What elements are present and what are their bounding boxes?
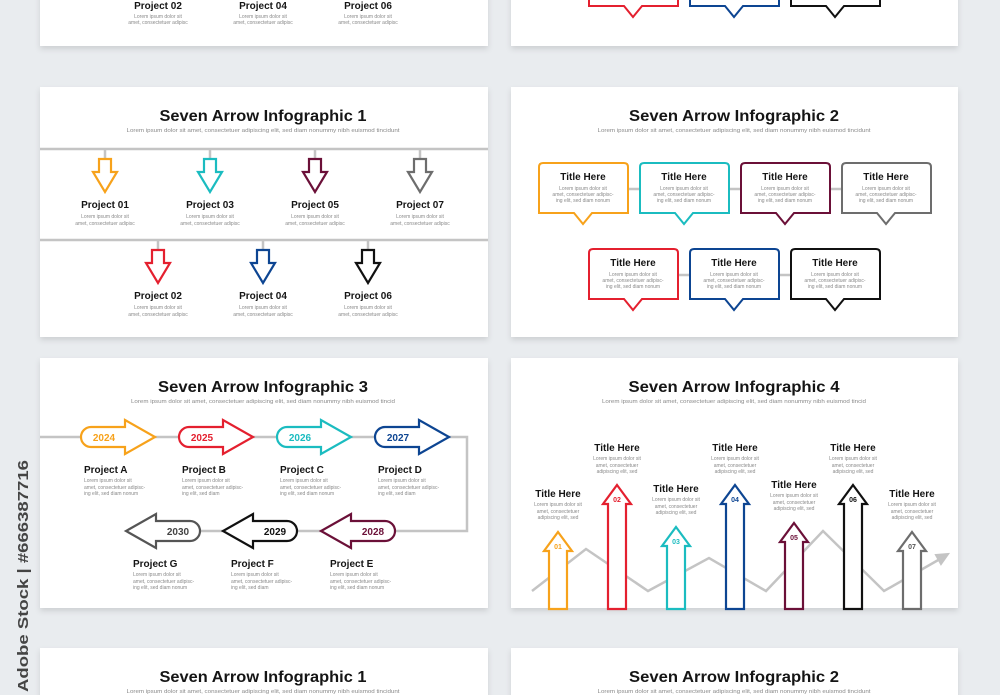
slide: Seven Arrow Infographic 1: Project 01: [81, 200, 129, 211]
slide: Seven Arrow Infographic 2: amet, consectetuer adipisc-: [855, 192, 917, 198]
slide: Seven Arrow Infographic 3: amet, consectetuer adipisc-: [280, 485, 341, 491]
slide: Seven Arrow Infographic 3: Lorem ipsum dolor sit: [231, 572, 279, 578]
slide: top-left partial: [40, 0, 488, 46]
slide: Seven Arrow Infographic 3: amet, consectetuer adipisc-: [84, 485, 145, 491]
slide: Seven Arrow Infographic 4: 05: [790, 535, 798, 542]
slide: Seven Arrow Infographic 4: amet, consectetuer: [832, 463, 875, 469]
slide: Seven Arrow Infographic 2: ing elit, sed diam nonum: [707, 284, 761, 290]
slide: top-left partial: Project 06: [344, 1, 392, 12]
slide: Seven Arrow Infographic 2: Title Here: [711, 258, 757, 269]
slide: Seven Arrow Infographic 3: ing elit, sed diam nonum: [330, 585, 384, 591]
slide: Seven Arrow Infographic 4: Title Here: [594, 443, 640, 454]
slide: Seven Arrow Infographic 2: Lorem ipsum dolor sit: [710, 272, 759, 278]
slide: Seven Arrow Infographic 3: ing elit, sed diam nonum: [84, 491, 138, 497]
slide: Seven Arrow Infographic 4: 03: [672, 539, 680, 546]
slide: Seven Arrow Infographic 3: Lorem ipsum dolor sit: [133, 572, 181, 578]
slide: Seven Arrow Infographic 4: adipiscing elit, sed: [715, 469, 756, 475]
slide: Seven Arrow Infographic 4: Lorem ipsum dolor sit: [888, 502, 937, 508]
slide: Seven Arrow Infographic 4: amet, consectetuer: [891, 509, 934, 515]
slide: Seven Arrow Infographic 4: 06: [849, 497, 857, 504]
slide: top-left partial: Lorem ipsum dolor sit: [134, 14, 183, 20]
slide: Seven Arrow Infographic 3: Project B: [182, 465, 226, 476]
slide: Seven Arrow Infographic 2: ing elit, sed diam nonum: [859, 198, 913, 204]
slide: Seven Arrow Infographic 1: amet, consectetuer adipisc: [338, 312, 398, 318]
slide: Seven Arrow Infographic 1: amet, consectetuer adipisc: [128, 312, 188, 318]
slide: Seven Arrow Infographic 3: 2030: [167, 527, 190, 538]
slide: Seven Arrow Infographic 4: Lorem ipsum dolor sit: [829, 456, 878, 462]
slide: Seven Arrow Infographic 4: Lorem ipsum dolor sit: [593, 456, 642, 462]
slide: Seven Arrow Infographic 4: Lorem ipsum dolor sit: [711, 456, 760, 462]
slide: Seven Arrow Infographic 4: amet, consectetuer: [773, 500, 816, 506]
slide: top-left partial: Project 04: [239, 1, 287, 12]
slide: Seven Arrow Infographic 4: 02: [613, 497, 621, 504]
slide: Seven Arrow Infographic 2: Title Here: [610, 258, 656, 269]
slide: Seven Arrow Infographic 3: Project C: [280, 465, 324, 476]
slide: Seven Arrow Infographic 3: Lorem ipsum dolor sit: [280, 478, 328, 484]
slide: Seven Arrow Infographic 4: Lorem ipsum dolor sit amet, consectetuer adipiscing elit, sed diam nonummy nibh euismod tincid: [602, 399, 866, 405]
slide: Seven Arrow Infographic 4: adipiscing elit, sed: [774, 506, 815, 512]
slide: top-left partial: Project 02: [134, 1, 182, 12]
slide: Seven Arrow Infographic 3: Project E: [330, 559, 374, 570]
slide: Seven Arrow Infographic 1: Project 05: [291, 200, 339, 211]
slide: Seven Arrow Infographic 2: Lorem ipsum dolor sit: [609, 272, 658, 278]
slide: Seven Arrow Infographic 2: Title Here: [812, 258, 858, 269]
slide: top-left partial: amet, consectetuer adipisc: [233, 20, 293, 26]
slide: Seven Arrow Infographic 1: [40, 87, 488, 337]
slide: Seven Arrow Infographic 2: ing elit, sed diam nonum: [556, 198, 610, 204]
slide: Seven Arrow Infographic 2: Lorem ipsum dolor sit: [559, 186, 608, 192]
slide: Seven Arrow Infographic 2: Lorem ipsum dolor sit: [862, 186, 911, 192]
slide: Seven Arrow Infographic 2: Lorem ipsum dolor sit: [811, 272, 860, 278]
slide: Seven Arrow Infographic 4: Lorem ipsum dolor sit: [652, 497, 701, 503]
slide: Seven Arrow Infographic 1: amet, consectetuer adipisc: [285, 221, 345, 227]
slide: Seven Arrow Infographic 3: ing elit, sed diam nonum: [133, 585, 187, 591]
slide: Seven Arrow Infographic 1: amet, consectetuer adipisc: [390, 221, 450, 227]
slide: Seven Arrow Infographic 3: ing elit, sed diam: [182, 491, 220, 497]
slide: Seven Arrow Infographic 3: amet, consectetuer adipisc-: [182, 485, 243, 491]
slide: Seven Arrow Infographic 4: Title Here: [889, 489, 935, 500]
slide: Seven Arrow Infographic 3: amet, consectetuer adipisc-: [330, 579, 391, 585]
slide: Seven Arrow Infographic 4: Lorem ipsum dolor sit: [534, 502, 583, 508]
slide: Seven Arrow Infographic 3: [40, 358, 488, 608]
slide: Seven Arrow Infographic 3: Project D: [378, 465, 422, 476]
slide: Seven Arrow Infographic 1: amet, consectetuer adipisc: [233, 312, 293, 318]
slide: Seven Arrow Infographic 3: Project F: [231, 559, 274, 570]
slide: Seven Arrow Infographic 4: amet, consectetuer: [714, 463, 757, 469]
slide: Seven Arrow Infographic 4: 07: [908, 544, 916, 551]
slide: Seven Arrow Infographic 4: Title Here: [712, 443, 758, 454]
slide: Seven Arrow Infographic 1: amet, consectetuer adipisc: [75, 221, 135, 227]
slide: top-right partial: [511, 0, 958, 46]
slide: top-left partial: amet, consectetuer adipisc: [128, 20, 188, 26]
slide: Seven Arrow Infographic 2: ing elit, sed diam nonum: [758, 198, 812, 204]
slide: Seven Arrow Infographic 3: ing elit, sed diam: [231, 585, 269, 591]
slide: Seven Arrow Infographic 4: adipiscing elit, sed: [833, 469, 874, 475]
slide: Seven Arrow Infographic 2: amet, consectetuer adipisc-: [754, 192, 816, 198]
slide: Seven Arrow Infographic 1: Lorem ipsum dolor sit amet, consectetuer adipiscing elit, sed diam nonummy nibh euismod tincidunt: [126, 128, 400, 134]
slide: Seven Arrow Infographic 3: amet, consectetuer adipisc-: [231, 579, 292, 585]
slide: Seven Arrow Infographic 2: Lorem ipsum dolor sit: [761, 186, 810, 192]
vertical watermark text: Adobe Stock | #666387716: [15, 460, 32, 692]
slide: Seven Arrow Infographic 1: Lorem ipsum dolor sit: [396, 214, 445, 220]
slide: Seven Arrow Infographic 1: Project 06: [344, 291, 392, 302]
slide: top-left partial: Lorem ipsum dolor sit: [239, 14, 288, 20]
slide: Seven Arrow Infographic 4: adipiscing elit, sed: [656, 510, 697, 516]
slide: Seven Arrow Infographic 3: Lorem ipsum dolor sit: [84, 478, 132, 484]
slide: Seven Arrow Infographic 1: Lorem ipsum dolor sit: [344, 305, 393, 311]
slide: Seven Arrow Infographic 1: Lorem ipsum dolor sit: [186, 214, 235, 220]
slide: top-left partial: amet, consectetuer adipisc: [338, 20, 398, 26]
slide: Seven Arrow Infographic 3: Seven Arrow Infographic 3: [158, 379, 368, 396]
slide: Seven Arrow Infographic 4: Title Here: [535, 489, 581, 500]
slide: Seven Arrow Infographic 4: Title Here: [653, 484, 699, 495]
slide: Seven Arrow Infographic 4: Title Here: [771, 480, 817, 491]
slide: Seven Arrow Infographic 4: 01: [554, 544, 562, 551]
slide: bottom-right partial: [511, 648, 958, 695]
slide: top-left partial: Lorem ipsum dolor sit: [344, 14, 393, 20]
slide: Seven Arrow Infographic 3: Lorem ipsum dolor sit amet, consectetuer adipiscing elit, sed diam nonummy nibh euismod tincid: [131, 399, 395, 405]
slide: Seven Arrow Infographic 3: 2026: [289, 433, 312, 444]
slide: Seven Arrow Infographic 1: amet, consectetuer adipisc: [180, 221, 240, 227]
slide: Seven Arrow Infographic 3: 2028: [362, 527, 385, 538]
slide: Seven Arrow Infographic 3: 2025: [191, 433, 214, 444]
slide: Seven Arrow Infographic 3: amet, consectetuer adipisc-: [378, 485, 439, 491]
slide: Seven Arrow Infographic 2: Title Here: [762, 172, 808, 183]
slide: Seven Arrow Infographic 3: 2027: [387, 433, 410, 444]
slide: Seven Arrow Infographic 2: amet, consectetuer adipisc-: [703, 278, 765, 284]
slide: bottom-left partial: Seven Arrow Infographic 1: [160, 669, 367, 686]
slide: Seven Arrow Infographic 4: Lorem ipsum dolor sit: [770, 493, 819, 499]
slide: Seven Arrow Infographic 4: amet, consectetuer: [655, 504, 698, 510]
slide: Seven Arrow Infographic 3: Project A: [84, 465, 128, 476]
slide: Seven Arrow Infographic 2: Lorem ipsum dolor sit amet, consectetuer adipiscing elit, sed diam nonummy nibh euismod tincidunt: [598, 128, 871, 134]
slide: Seven Arrow Infographic 2: Title Here: [863, 172, 909, 183]
slide: Seven Arrow Infographic 3: 2029: [264, 527, 287, 538]
slide: Seven Arrow Infographic 1: Lorem ipsum dolor sit: [134, 305, 183, 311]
slide: Seven Arrow Infographic 4: [511, 358, 958, 609]
slide: Seven Arrow Infographic 3: Project G: [133, 559, 178, 570]
slide: Seven Arrow Infographic 3: Lorem ipsum dolor sit: [378, 478, 426, 484]
slide: bottom-left partial: Lorem ipsum dolor sit amet, consectetuer adipiscing elit, sed diam nonummy nibh euismod tincidunt: [126, 689, 400, 695]
slide: Seven Arrow Infographic 2: ing elit, sed diam nonum: [808, 284, 862, 290]
slide: Seven Arrow Infographic 2: amet, consectetuer adipisc-: [804, 278, 866, 284]
slide: Seven Arrow Infographic 2: Title Here: [560, 172, 606, 183]
slide: Seven Arrow Infographic 4: adipiscing elit, sed: [597, 469, 638, 475]
slide: Seven Arrow Infographic 2: ing elit, sed diam nonum: [606, 284, 660, 290]
slide: Seven Arrow Infographic 1: Project 03: [186, 200, 234, 211]
slide: Seven Arrow Infographic 2: ing elit, sed diam nonum: [657, 198, 711, 204]
slide: Seven Arrow Infographic 3: amet, consectetuer adipisc-: [133, 579, 194, 585]
slide: Seven Arrow Infographic 1: Project 02: [134, 291, 182, 302]
slide: Seven Arrow Infographic 3: ing elit, sed diam nonum: [280, 491, 334, 497]
slide: Seven Arrow Infographic 1: Lorem ipsum dolor sit: [291, 214, 340, 220]
slide: Seven Arrow Infographic 3: 2024: [93, 433, 116, 444]
slide: Seven Arrow Infographic 4: adipiscing elit, sed: [538, 515, 579, 521]
slide: bottom-left partial: [40, 648, 488, 695]
slide: Seven Arrow Infographic 1: Project 04: [239, 291, 287, 302]
slide: bottom-right partial: Seven Arrow Infographic 2: [629, 669, 839, 686]
slide: Seven Arrow Infographic 1: Seven Arrow Infographic 1: [160, 108, 367, 125]
slide: Seven Arrow Infographic 4: Title Here: [830, 443, 876, 454]
slide: Seven Arrow Infographic 1: Lorem ipsum dolor sit: [81, 214, 130, 220]
slide: Seven Arrow Infographic 2: Title Here: [661, 172, 707, 183]
slide: Seven Arrow Infographic 2: Lorem ipsum dolor sit: [660, 186, 709, 192]
slide: Seven Arrow Infographic 2: [511, 87, 958, 337]
slide: Seven Arrow Infographic 3: Lorem ipsum dolor sit: [182, 478, 230, 484]
slide: Seven Arrow Infographic 2: amet, consectetuer adipisc-: [602, 278, 664, 284]
slide: Seven Arrow Infographic 2: amet, consectetuer adipisc-: [653, 192, 715, 198]
slide: Seven Arrow Infographic 4: 04: [731, 497, 739, 504]
slide: Seven Arrow Infographic 1: Lorem ipsum dolor sit: [239, 305, 288, 311]
slide: Seven Arrow Infographic 4: amet, consectetuer: [596, 463, 639, 469]
slide: Seven Arrow Infographic 2: Seven Arrow Infographic 2: [629, 108, 839, 125]
slide: Seven Arrow Infographic 3: Lorem ipsum dolor sit: [330, 572, 378, 578]
slide: Seven Arrow Infographic 3: ing elit, sed diam: [378, 491, 416, 497]
slide: Seven Arrow Infographic 4: amet, consectetuer: [537, 509, 580, 515]
slide: Seven Arrow Infographic 4: Seven Arrow Infographic 4: [628, 379, 840, 396]
slide: Seven Arrow Infographic 4: adipiscing elit, sed: [892, 515, 933, 521]
slide: bottom-right partial: Lorem ipsum dolor sit amet, consectetuer adipiscing elit, sed diam nonummy nibh euismod tincidunt: [598, 689, 871, 695]
slide: Seven Arrow Infographic 1: Project 07: [396, 200, 444, 211]
slide: Seven Arrow Infographic 2: amet, consectetuer adipisc-: [552, 192, 614, 198]
